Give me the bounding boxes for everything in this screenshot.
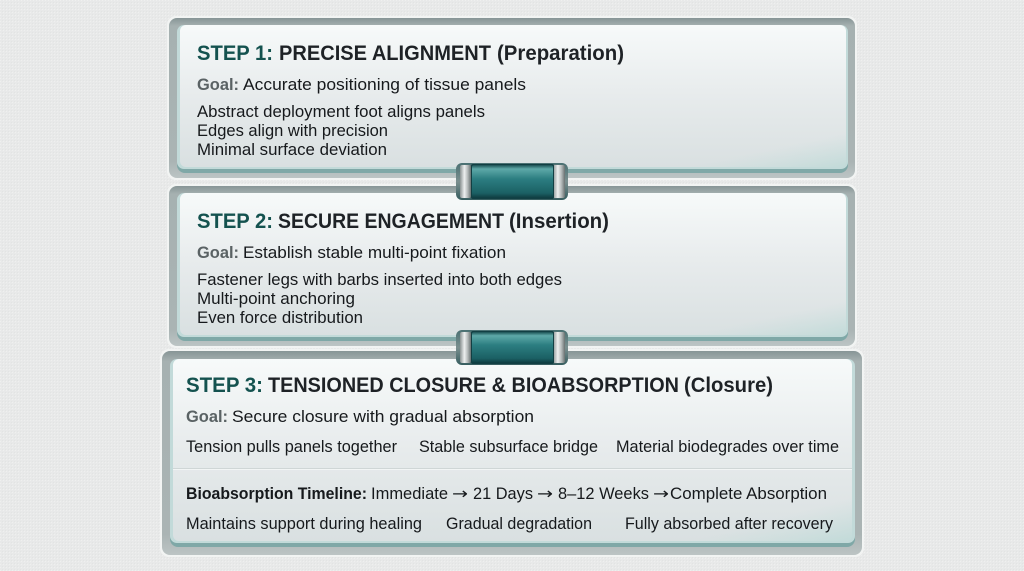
text: step 1 details: Edges align with precision — [197, 121, 388, 140]
text: step 1 details — [197, 102, 485, 159]
text: timeline notes: Gradual degradation — [446, 514, 592, 533]
text: closure mechanics: Material biodegrades over time — [616, 437, 839, 456]
text: step 1 details: Minimal surface deviation — [197, 140, 387, 159]
heading: step 3: TENSIONED CLOSURE & BIOABSORPTION — [268, 374, 679, 397]
heading: step 2: SECURE ENGAGEMENT — [278, 210, 504, 233]
heading: step 2 — [197, 210, 609, 233]
text: bioabsorption timeline: Immediate — [371, 484, 448, 503]
heading: step 3: STEP 3: — [186, 374, 263, 397]
heading: step 3: (Closure) — [684, 374, 773, 397]
text: closure mechanics: Tension pulls panels together — [186, 437, 397, 456]
text: step 3 goal: Goal: — [186, 407, 228, 426]
panel: step 3 — [160, 349, 864, 557]
text: bioabsorption timeline: → — [452, 484, 468, 503]
heading: step 1: PRECISE ALIGNMENT — [279, 42, 491, 65]
icon: connector 2 — [456, 330, 568, 365]
text: bioabsorption timeline: → — [537, 484, 553, 503]
text: step 2 details: Even force distribution — [197, 308, 363, 327]
heading: step 1: (Preparation) — [497, 42, 624, 65]
text: closure mechanics — [186, 437, 839, 456]
text: step 2 details: Multi-point anchoring — [197, 289, 355, 308]
text: timeline notes: Maintains support during healing — [186, 514, 422, 533]
text: step 2 goal: Goal: — [197, 243, 239, 262]
icon: connector 1 — [456, 163, 568, 200]
panel: step 2 — [167, 184, 857, 348]
text: bioabsorption timeline: Complete Absorption — [670, 484, 827, 503]
text: step 2 goal: Establish stable multi-point fixation — [243, 243, 506, 262]
panel: step 1 — [167, 16, 857, 180]
heading: step 2: STEP 2: — [197, 210, 273, 233]
text: bioabsorption timeline: 8–12 Weeks — [558, 484, 649, 503]
text: step 3 goal: Secure closure with gradual absorption — [232, 407, 534, 426]
text: bioabsorption timeline: → — [653, 484, 669, 503]
text: timeline notes — [186, 514, 833, 533]
text: closure mechanics: Stable subsurface bridge — [419, 437, 598, 456]
text: bioabsorption timeline: Bioabsorption Timeline: — [186, 484, 367, 503]
text: step 1 goal: Goal: — [197, 75, 239, 94]
text: step 1 goal: Accurate positioning of tissue panels — [243, 75, 526, 94]
text: bioabsorption timeline: 21 Days — [473, 484, 533, 503]
heading: step 2: (Insertion) — [509, 210, 609, 233]
text: bioabsorption timeline — [186, 484, 827, 503]
heading: step 1 — [197, 42, 624, 65]
text: timeline notes: Fully absorbed after recovery — [625, 514, 833, 533]
text: step 2 details — [197, 270, 562, 327]
text: step 1 details: Abstract deployment foot aligns panels — [197, 102, 485, 121]
text: step 2 details: Fastener legs with barbs inserted into both edges — [197, 270, 562, 289]
heading: step 1: STEP 1: — [197, 42, 273, 65]
